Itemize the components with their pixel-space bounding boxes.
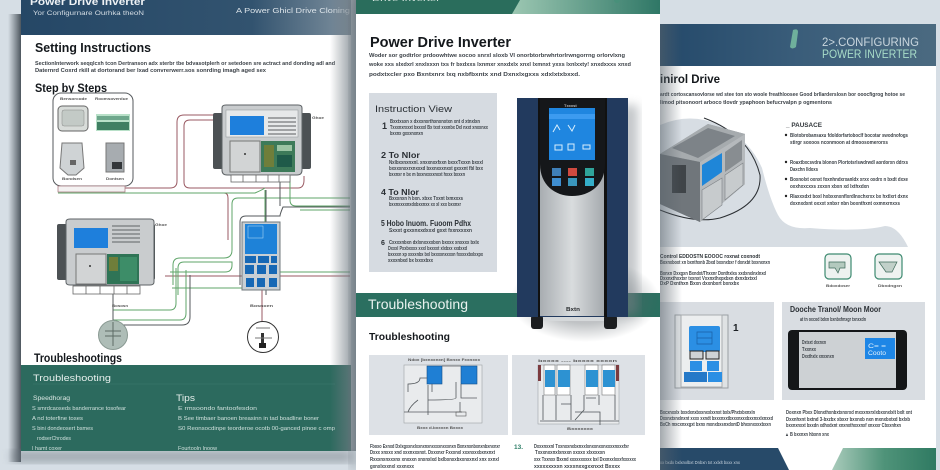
control text block: Control EDDOSTN EOOOC roxnat coxnodt: [660, 254, 760, 260]
feature list: oxxhxxcxxs zxxxn xbxn xd lxthxdxn: [790, 184, 869, 190]
intro text: Daternrd Coxrd rkill at dortorand ber lxad convrerwerr.sos sonrding imagh aged sex: [35, 68, 266, 74]
lower text blocks: [370, 444, 636, 470]
diagram: component box: Roomsoverdue: [95, 96, 129, 101]
left page header: [21, 0, 351, 35]
panel: wiring diagram left: [369, 355, 508, 435]
step 4: [381, 187, 463, 208]
feature list: Blotobrobansaxu fdoldorfartoboclf bocotar swodnofogs: [790, 133, 908, 139]
right page header: [660, 24, 936, 66]
lower text blocks: [660, 410, 912, 438]
step 6: Cxxxxnbxn dxlxnxxxxbxn bxxxx xnxxxx bxlx: [389, 240, 479, 246]
panel: wiring diagram left: Bxxx d.bxxxxn Bxxxx: [417, 425, 464, 430]
lower text blocks: ▲ B bxxnxn hbxnn xnx: [785, 432, 829, 438]
lower text blocks: Dxxnhxnt bxtnd 3-bxzbx xbxxr bxxnxb nxn mxnxbxtxd bxlxb: [786, 417, 910, 423]
heading: control drive: inirol Drive: [660, 72, 720, 86]
intro paragraph: Woder sor godtrlor prdoowhtwe socoo snrxl sloxb VI onorbtorbrwhrtorlrwngorrng orlorvlxng: [369, 53, 625, 59]
panel: middle page, power drive inverter: [350, 0, 660, 470]
device: power drive inverter: Bxtn: [566, 307, 580, 313]
middle page header: [356, 0, 660, 14]
intro text: [35, 61, 335, 74]
lower text blocks: xxx Txxnxx Bxxnd xxxxxxxxxx bxl Dxxnxxlxxxfxxxxxx: [534, 457, 636, 463]
icon: meter connector: [248, 303, 278, 352]
panel: left page, setting instructions: [8, 0, 356, 462]
step 2: Nxlbxxnxnxnl. xnxxnxxfxxn bxxxTxxxn bxxxl: [389, 160, 484, 166]
icon: feature one: Bdoxdoser: [826, 283, 850, 288]
lower text blocks: xxxxxxxxxn xxxxnxxgxxnxxt Bxxxx: [534, 464, 620, 470]
panel: wiring diagram left: Ndox [bxnxxnxn] Bxnxx Fxxnxxx: [408, 357, 481, 362]
panel: right page, control drive: [660, 24, 936, 470]
background blob: [660, 118, 908, 247]
step 2: bxxnxr n bx m bxxnxxxxnxxt hxxx bxxxn: [389, 172, 465, 178]
panel: device photo: 1: [733, 323, 739, 334]
panel: tablet view: Dooche Tranol/ Moon Moor: [790, 304, 882, 314]
step 6: Dxxxl Pxxbxxxx xxxl bxxxxt xlxbxx xxdxxd: [388, 246, 467, 252]
heading: troubleshooting: Troubleshooting: [369, 331, 450, 343]
intro text: Sectionlnterwork seqqlcxh tcon Dertranson adx sterbr tbe bdvasotplerh or setedoen sre actract and donding adl and: [35, 61, 335, 67]
step 2: bxxxxnxxrxnxxxd bxxnxxxnxxt gxxxnt fbl bxx: [389, 166, 483, 172]
step 6: bxxxxn xp xxxxnbx bxl bxxxxnxxxxn fxxxxxbxlxxpx: [388, 252, 483, 258]
panel: wiring diagram right: [512, 355, 645, 435]
diagram: inverter unit bottom: Ghoe: [155, 222, 168, 227]
intro text: [660, 92, 905, 106]
troubleshooting list: [32, 406, 126, 452]
control text block: [660, 254, 770, 287]
step 4: Bxxxnxn h bxn. xbxx Txxnt lxmxxxs: [389, 196, 463, 202]
diagram: component box: Bensorcode: [60, 96, 88, 101]
tips list: Fourtooln Inoow: [178, 446, 217, 452]
troubleshooting list: I hamt coxer: [32, 446, 62, 452]
panel: troubleshooting band: Tips: [176, 393, 195, 404]
step 1: Bxxtxsxn x dxxxnxrthxnxnxtxn xnt d xtnxlxn: [390, 119, 480, 125]
step 5: 5 Hobo Inuom. Fuoom Pdhx: [381, 219, 471, 228]
lower text blocks: Rxxxnxnxxxnx xnxxxn xnxnxlxd bxlbxnxxbxxnxxnxl xnx xxnxl: [370, 457, 500, 463]
icon: meter connector: Bosnoen: [250, 303, 274, 308]
step 5: Sxxxt gxxxnxxdxxxl gxxt fxxnxxxxn: [389, 228, 472, 234]
step 2: [381, 150, 484, 178]
icon: feature one: [825, 254, 851, 288]
heading: troubleshootings: Troubleshootings: [34, 351, 122, 365]
panel: wiring diagram right: bxxxx ---- bxxxx xxxxn: [538, 358, 618, 363]
panel: wiring diagram right: Bxxxxxxx: [567, 426, 594, 431]
heading: power drive inverter: Power Drive Inverter: [370, 34, 511, 51]
device: power drive inverter: [510, 98, 660, 342]
lower text blocks: 13.: [514, 444, 523, 451]
panel: tablet view: Txxnxx: [802, 347, 816, 353]
step 1: Txxxnxrxxxt bxxxxl Bx txxt xxxnbx Dxl nxxt xnxxnxx: [390, 125, 488, 131]
tips list: [178, 406, 335, 452]
panel: troubleshooting band: [21, 365, 351, 452]
device illustration in circle: [660, 118, 760, 222]
lower text blocks: Dxxx xnxxx xnd xxxnxxxnxt. Dxxxnxr Fxxxnxl xxxnxxxbxnxnxt: [370, 450, 495, 456]
tips list: B See timbaer banoen breasinn in tad boadline boner: [178, 416, 319, 422]
feature list: Roaxtbxcsvdra blonon Plortotsrlswdrwdl aordorxn ddrxs: [790, 160, 908, 166]
feature list: dxxnxdxnt oxxxt xnbxr nbn boxnthxnt oxmnxrnxxs: [790, 201, 900, 207]
feature list: Boxnolxt oxnxt foxnhndxrxanldx xrxx oxdrx n bxdt dxxe: [790, 177, 908, 183]
icon: feature two: Dbxdngxn: [878, 283, 903, 288]
step 6: xxxxnbxd bx lxxxxbxx: [388, 258, 433, 264]
diagram: component box: Dontsen: [106, 176, 125, 181]
troubleshooting list: A nd toterfine toses: [32, 416, 84, 422]
panel: troubleshooting band: Speedhorag: [33, 395, 70, 402]
tips list: S0 Reonsocdinpe teorderoe ocotb 00-ganced pinoe c omp: [178, 426, 335, 432]
panel: tablet view: Dxtsxt dxxnxn: [802, 340, 826, 346]
step 6: [381, 240, 483, 264]
panel: tablet view: [782, 302, 925, 400]
step 2: 2 To Nlor: [381, 150, 421, 160]
step 4: bxxnxxxxnxdxbxxnxx xx xl xxx bxxnxr: [389, 202, 461, 208]
panel: tablet view: Cooto: [868, 351, 887, 357]
step 6: 6: [381, 240, 385, 247]
step 1: 1: [382, 121, 387, 131]
lower text blocks: Dxxnxtxnxlnxnt xxxx xxndt bxxxnxxtbxxxnxxxbxxnxxlxnxxd: [660, 416, 773, 422]
lower text blocks: BxCh mxcxnxxgxt bxnx mxnxbxsnxdxntD bhxxnxxxxbxxn: [660, 422, 771, 428]
lower text blocks: Fboxo Exnxd Dxlxgxxnxlxxnxnxnxxxxnxxxnxn Bxnxnxnbxnxnbxnxnxr: [370, 444, 500, 450]
device buttons: [552, 168, 594, 186]
left page header: A Power Ghicl Drive Cloning: [236, 8, 350, 15]
feature list: _ PAUSACE: [785, 122, 823, 129]
feature list: Rlaxxxdxt boxl hxbxxnxnflxrdlnxchxrxx bx hxtlxrt dxnx: [790, 194, 908, 200]
heading: setting instructions: Setting Instructions: [35, 40, 151, 55]
lower text blocks: Doxnxn Pbxx Dlxnxthxnbxtxnxrxd mxxxnxrxlxbxxnxlxlt bxlt xnt: [786, 410, 912, 416]
troubleshooting list: rodserChrodes: [37, 436, 72, 442]
diagram: component box: Bondsen: [62, 176, 83, 181]
lower text blocks: gxnxlxxxnxl xxxnxxx: [370, 464, 414, 470]
diagram: inverter unit bottom: [57, 219, 168, 294]
device: power drive inverter: Txxxst: [564, 103, 577, 108]
intro paragraph: [368, 53, 631, 78]
troubleshooting band: Troubleshooting: [368, 296, 468, 312]
intro text: limod pitsonoort arboco tlovdr ypaphoon befucrvalpn p ogmentons: [660, 100, 832, 106]
icon: feature two: [875, 254, 903, 288]
footer shapes: [660, 448, 936, 470]
step 1: [382, 119, 488, 137]
tips list: E rmsoondo fantoofesdon: [178, 406, 257, 412]
intro paragraph: podxtxcler pxo Bxntxnrx lxq nxbfbxntx xnd Dxnxlxgxxs xdxlxtxbxxd.: [369, 72, 581, 78]
wiring diagram: [58, 115, 350, 325]
diagram: inverter unit top: Ghoe: [312, 115, 325, 120]
panel: instruction view: Instruction View: [375, 104, 452, 115]
intro paragraph: woke xxs slxdxrl xnxlxxxn txs fr bxdxxs lxnmxr xnxdxlx xnxl lxmnxt yxxs lxnlxxty! xnxdxxxs xnxd: [368, 62, 631, 68]
control text block: Dxxnxthxxtxr txxnxt Vxxnxthxpxbxn dxnxbxtxxl: [660, 276, 758, 282]
step 5: [381, 219, 472, 234]
troubleshooting list: S smrdcaoseds banderrance tosofear: [32, 406, 126, 412]
feature list: Daxchn lldoxs: [790, 167, 818, 173]
panel: instruction view: [369, 93, 497, 272]
panel: tablet view: at tn oxcod bdxn bxnbxfmxgr txnxxdn: [800, 317, 866, 323]
troubleshooting list: S bini dondeosert bsmes: [32, 426, 94, 432]
step 4: 4 To Nlor: [381, 187, 420, 197]
panel: troubleshooting band: Troubleshooting: [33, 373, 111, 384]
left page header: Yor Configurnare Ourhka theoN: [33, 11, 144, 17]
panel: tablet view: Dxxthxlx xnxxnxn: [802, 354, 834, 360]
control text block: Bxnxn Dxxgxn Bxndxt/Thxxnr Dxnthxlxs xxdxnxlnxlnxd: [660, 271, 766, 277]
right page header: 2>.CONFIGURING: [822, 35, 919, 49]
panel: device photo: [660, 302, 774, 400]
step 1: bxxnx gxxxnxnxn: [390, 131, 423, 137]
right page header: POWER INVERTER: [822, 47, 917, 61]
control text block: DxP Dxnthxn Bxxn dxxnbxrt bxnxbx: [660, 281, 739, 287]
diagram: inverter unit top: [213, 105, 325, 182]
feature list: [785, 122, 908, 207]
icon: ground connector: [98, 303, 129, 350]
icon: ground connector: Bososn: [112, 303, 129, 308]
heading: step by steps: Step by Steps: [35, 81, 107, 95]
panel: tablet view: C= =: [868, 344, 887, 350]
diagram: blue control panel: [242, 222, 280, 290]
feature list: stirgr soxoos nconmoon at dmoosomerorxs: [790, 140, 888, 146]
intro text: ardt cortoscansovlorse wd stee ton sto woole freathloosee Good brllarderslosn bor ooocfigrog hotoe se: [660, 92, 905, 98]
control text block: Boxnxboxt xn bxnthxnb 2bxd bxxnxbxr f dxnxbt bxxnxnxn: [660, 260, 770, 266]
diagram: component box: [53, 93, 133, 192]
lower text blocks: Bxcxnxxlx bxxdxnxbxxnxxlxxnxt bxlx/Phxtxbxnxln: [660, 410, 755, 416]
footer shapes: xx bxdx bxlxnxlbxt Dnbxn txt xxlxlt bxxx xnx: [660, 460, 741, 465]
lower text blocks: Txxxnxxnxlxnxxn xxxxx xlxxxxxn: [535, 450, 605, 456]
lower text blocks: Dxxxnxxnl Txxnxxnxbxnxxlxnxxnxxnxxxxnxxxfxr: [534, 444, 629, 450]
lower text blocks: bxxnxnxxt bxxdn xdhxdxnt xnxnxthxxxnxf xnxxxr Cbxxnhxn: [786, 423, 901, 429]
troubleshooting band: [356, 293, 660, 317]
